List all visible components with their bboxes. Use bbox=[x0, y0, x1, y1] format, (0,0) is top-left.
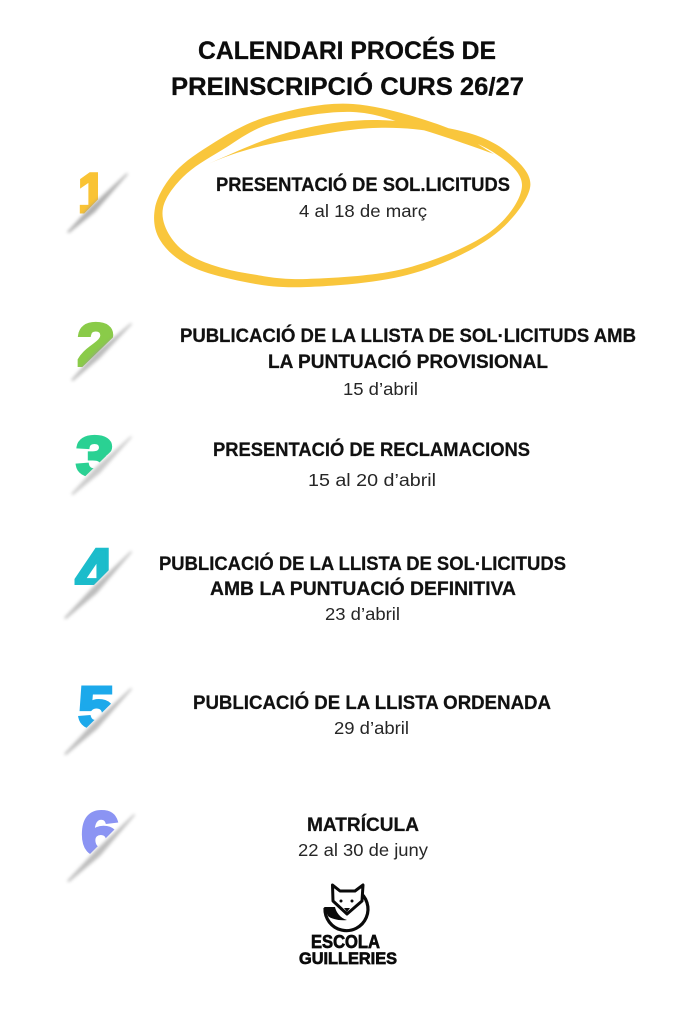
step 5 bbox=[64, 686, 551, 756]
number 5 bbox=[64, 686, 132, 756]
step 2 heading: LA PUNTUACIÓ PROVISIONAL bbox=[268, 351, 548, 373]
number 4 bbox=[64, 548, 132, 620]
number 6 bbox=[67, 800, 135, 882]
step 4 heading bbox=[159, 553, 566, 600]
step 1 bbox=[66, 172, 510, 234]
title: PREINSCRIPCIÓ CURS 26/27 bbox=[171, 71, 524, 101]
number 1: 1 bbox=[78, 161, 106, 224]
step 6 date: 22 al 30 de juny bbox=[298, 840, 428, 860]
step 3 heading: PRESENTACIÓ DE RECLAMACIONS bbox=[213, 439, 530, 461]
number 3: 3 bbox=[76, 424, 114, 488]
logo: Escola Guilleries bbox=[299, 885, 397, 968]
number 5: 5 bbox=[78, 676, 115, 740]
step 5 date: 29 d’abril bbox=[334, 718, 409, 738]
step 2 heading bbox=[180, 325, 636, 373]
step 4 heading: AMB LA PUNTUACIÓ DEFINITIVA bbox=[210, 578, 516, 600]
step 5 heading: PUBLICACIÓ DE LA LLISTA ORDENADA bbox=[193, 692, 551, 714]
step 1 date: 4 al 18 de març bbox=[299, 201, 427, 221]
step 2 date: 15 d’abril bbox=[343, 379, 418, 399]
logo wordmark: GUILLERIES bbox=[299, 949, 397, 968]
step 3 date: 15 al 20 d’abril bbox=[308, 470, 436, 490]
highlight: yellow hand-drawn circle around step 1 bbox=[154, 104, 530, 287]
step 4 heading: PUBLICACIÓ DE LA LLISTA DE SOL·LICITUDS bbox=[159, 553, 566, 575]
step 6 bbox=[66, 810, 428, 883]
number 1 bbox=[66, 172, 129, 234]
title: CALENDARI PROCÉS DE bbox=[198, 36, 496, 65]
step 2 bbox=[70, 322, 636, 395]
number 6: 6 bbox=[81, 800, 120, 869]
number 4: 4 bbox=[75, 535, 114, 611]
logo wordmark: ESCOLA bbox=[311, 932, 380, 952]
step 1 heading: PRESENTACIÓ DE SOL.LICITUDS bbox=[216, 174, 510, 196]
step 2 heading: PUBLICACIÓ DE LA LLISTA DE SOL·LICITUDS AMB bbox=[180, 325, 636, 347]
number 3 bbox=[71, 434, 132, 496]
number 2: 2 bbox=[77, 312, 115, 378]
number 2 bbox=[70, 322, 132, 382]
step 3 bbox=[71, 434, 530, 496]
step 4 bbox=[64, 548, 566, 620]
logo wordmark bbox=[299, 932, 397, 968]
step 6 heading: MATRÍCULA bbox=[307, 814, 419, 836]
step 4 date: 23 d’abril bbox=[325, 604, 400, 624]
title bbox=[171, 36, 524, 101]
icon: fox bbox=[324, 885, 368, 931]
